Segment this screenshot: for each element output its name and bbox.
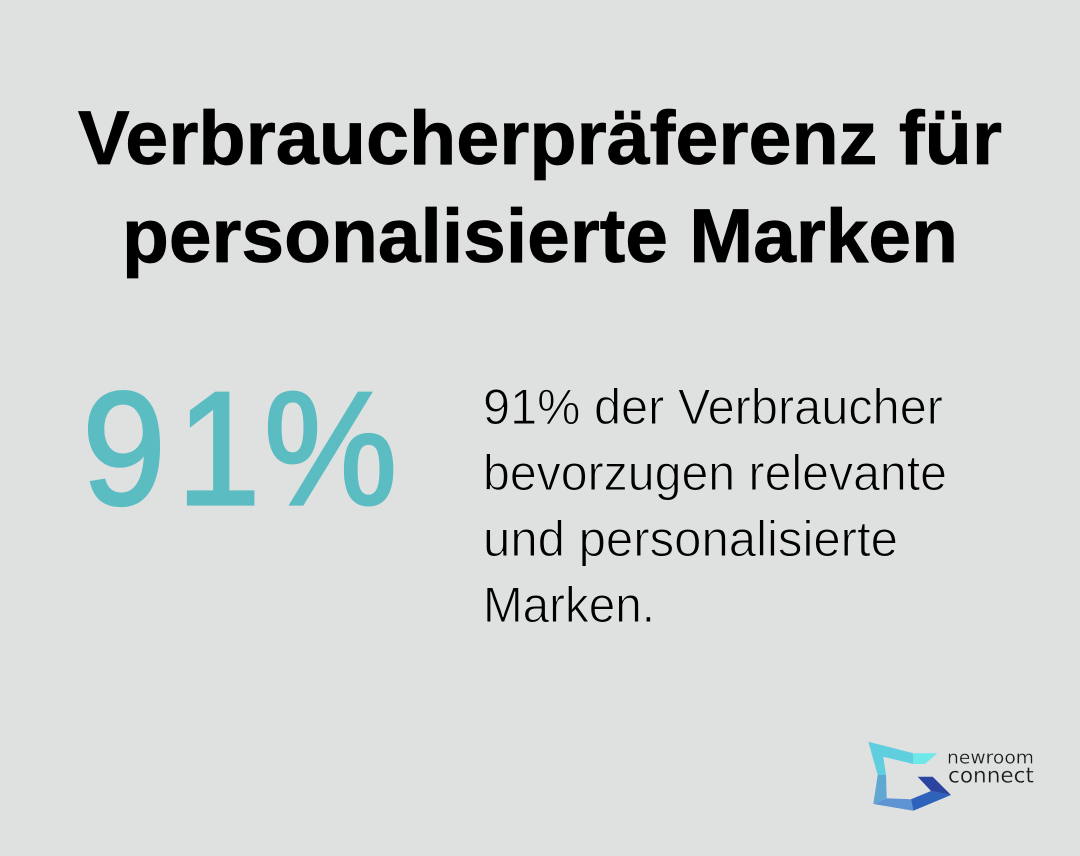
icon: logo mark	[868, 742, 951, 811]
big statistic: 91%: 91%	[82, 358, 397, 538]
logo wordmark: newroom	[947, 748, 1034, 768]
title	[78, 96, 1002, 279]
title: Verbraucherpräferenz für	[78, 96, 1002, 181]
description text: bevorzugen relevante	[483, 445, 947, 501]
logo wordmark: connect	[948, 764, 1034, 788]
description text: Marken.	[483, 577, 655, 633]
logo: newroom connect	[868, 742, 1034, 811]
logo wordmark	[947, 748, 1034, 788]
title: personalisierte Marken	[122, 194, 958, 279]
description text: 91% der Verbraucher	[483, 379, 943, 435]
description text: und personalisierte	[483, 511, 898, 567]
description text	[483, 379, 947, 633]
